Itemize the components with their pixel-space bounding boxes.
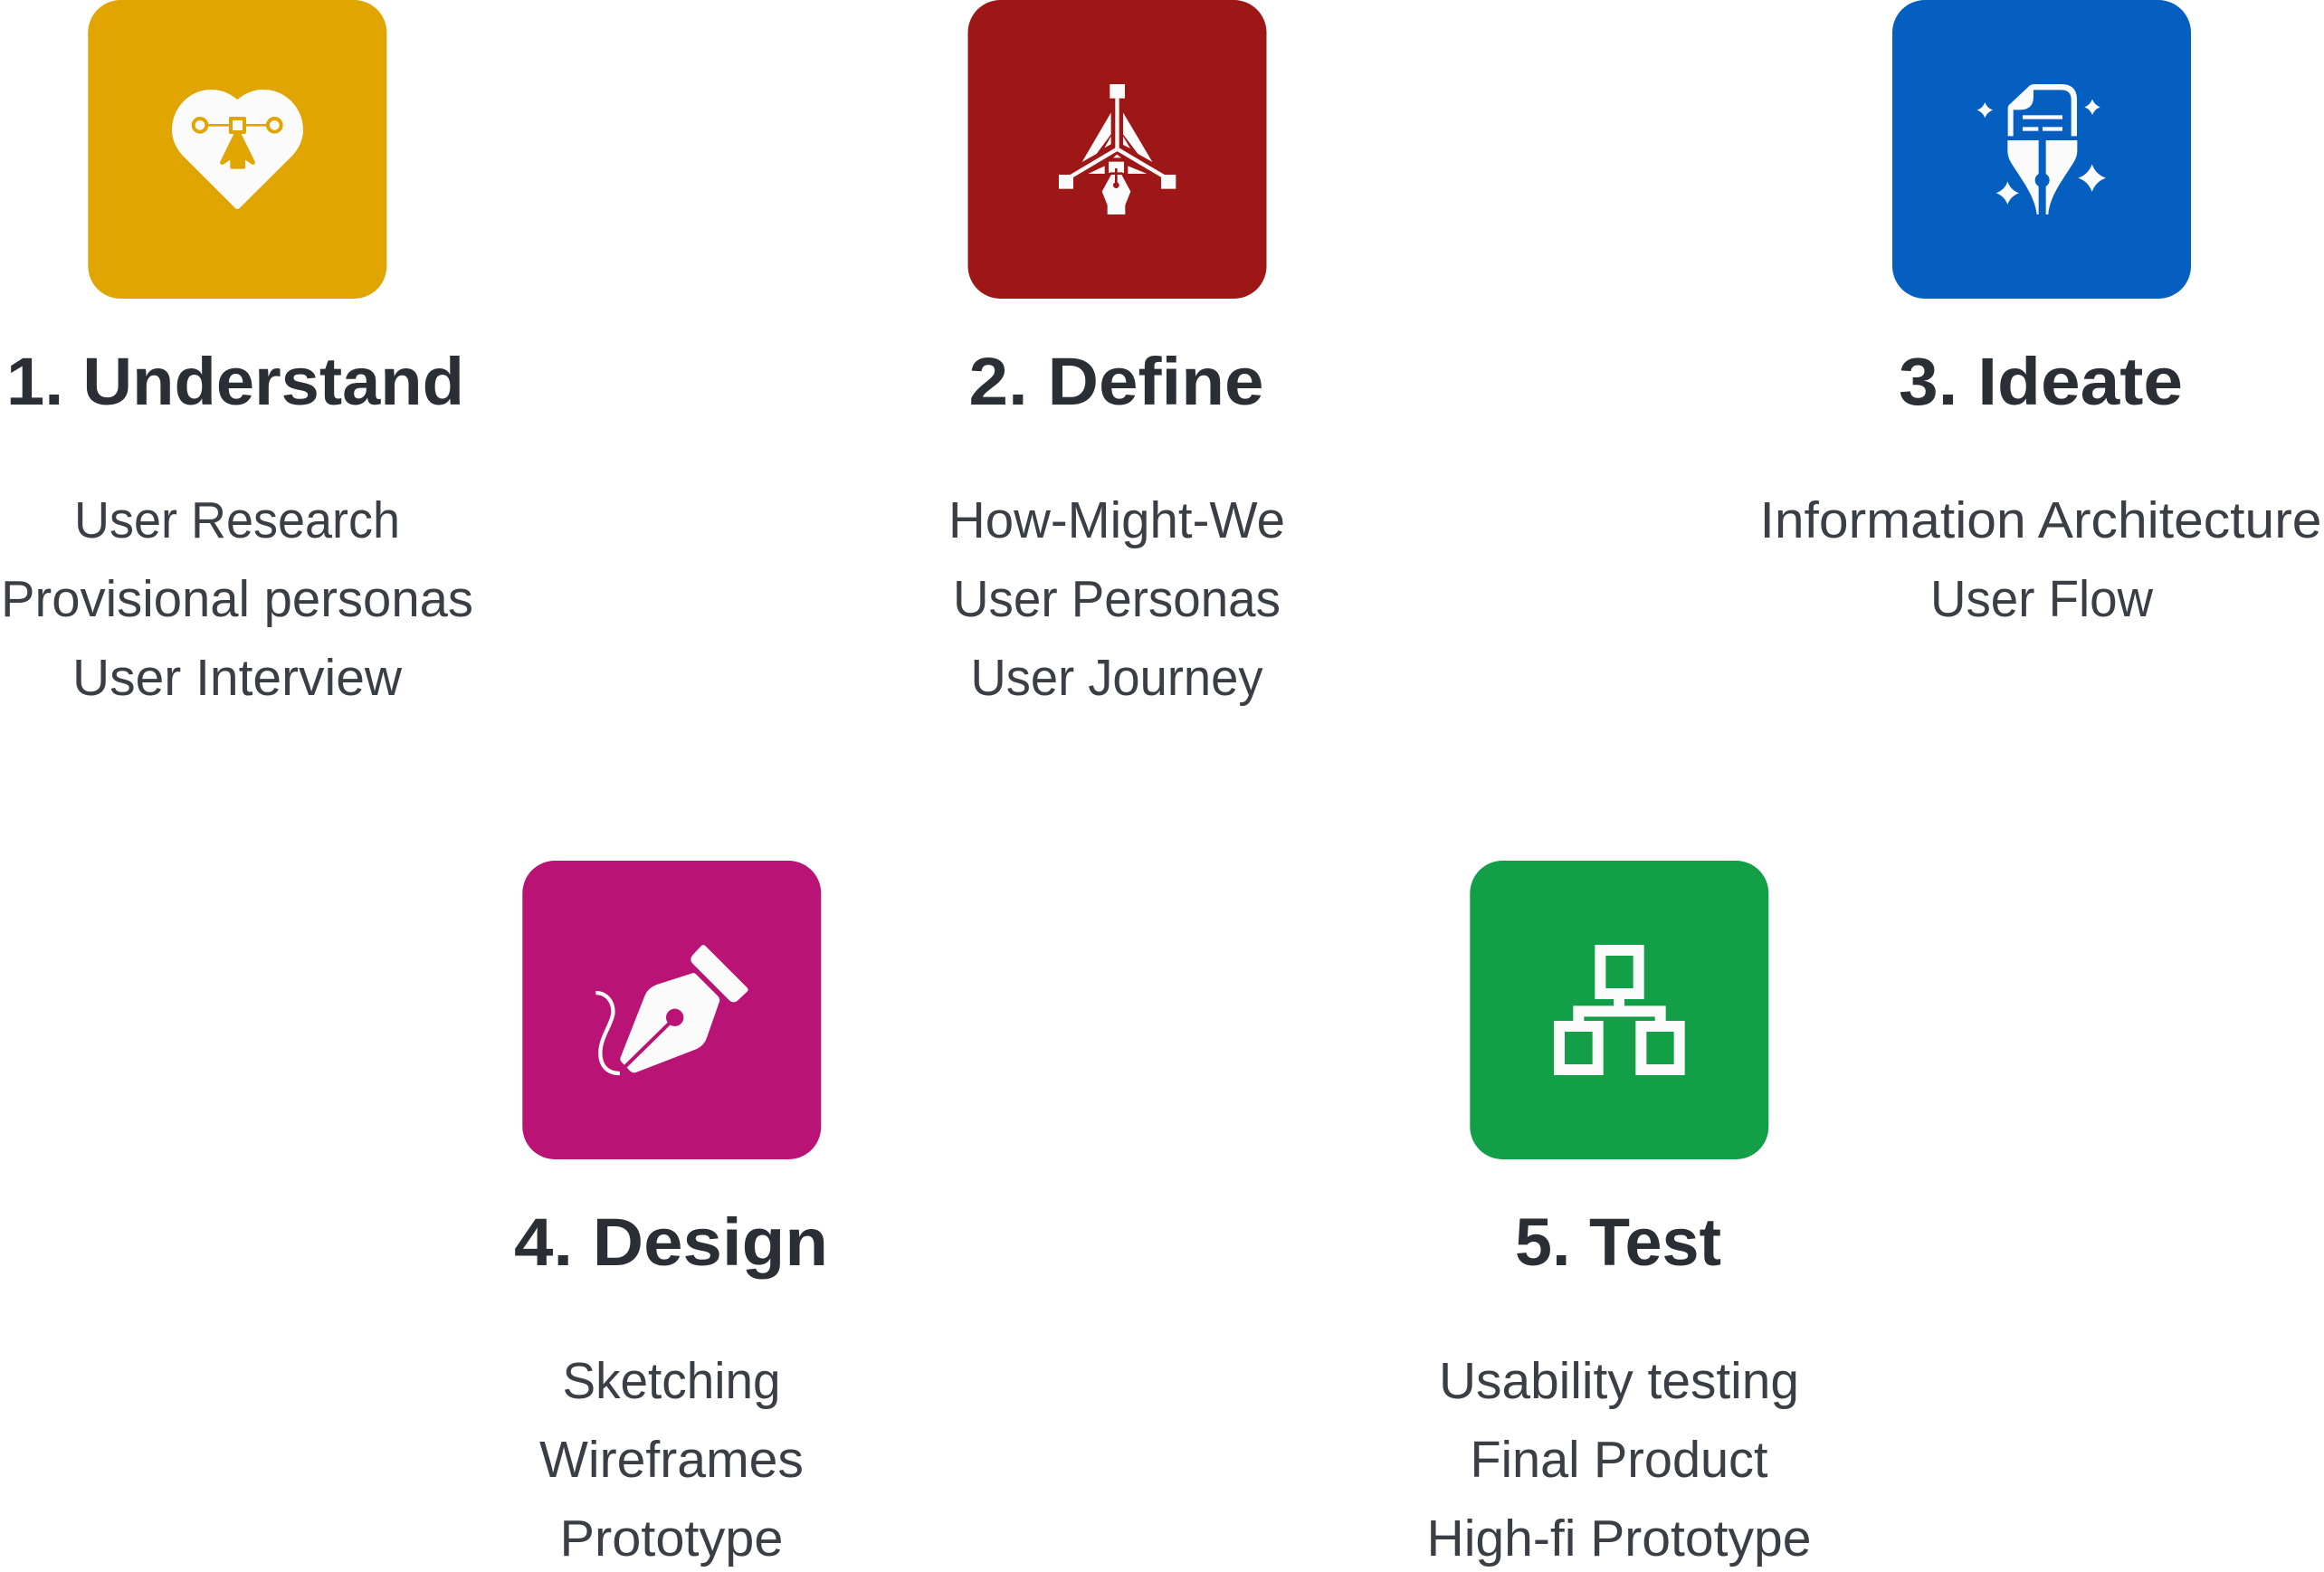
heading: 4. Design: 4. Design [514,1205,828,1280]
list: test activities [1426,1352,1812,1567]
heading: 2. Define: 2. Define [968,344,1263,419]
panel: step 4 design [514,861,828,1567]
panel: step 3 ideate [1759,0,2322,628]
list: ideate activities: Information Architecture [1759,491,2322,549]
list: define activities: User Journey [970,649,1263,707]
list: design activities: Wireframes [539,1431,804,1489]
list: define activities [948,491,1285,707]
icon card: gold heart with vector path [88,0,386,299]
panel: step 1 understand [1,0,473,707]
list: understand activities: User Research [74,491,400,549]
icon card: blue document pen with sparkles [1892,0,2191,299]
panel: step 5 test [1426,861,1812,1567]
list: ideate activities: User Flow [1930,570,2154,628]
list: ideate activities [1759,491,2322,628]
list: understand activities [1,491,473,707]
list: define activities: How-Might-We [948,491,1285,549]
heading: 3. Ideate: 3. Ideate [1899,344,2183,419]
list: design activities [539,1352,804,1567]
list: design activities: Prototype [559,1510,784,1567]
list: understand activities: User Interview [72,649,403,707]
panel: step 2 define [948,0,1285,707]
list: test activities: Usability testing [1439,1352,1799,1410]
heading: 5. Test: 5. Test [1515,1205,1721,1280]
icon card: green hierarchy diagram [1470,861,1768,1159]
list: define activities: User Personas [953,570,1281,628]
heading: 1. Understand: 1. Understand [6,344,464,419]
icon card: magenta fountain pen [522,861,821,1159]
list: understand activities: Provisional personas [1,570,473,628]
icon card: red vector pen [968,0,1267,299]
list: design activities: Sketching [563,1352,780,1410]
list: test activities: Final Product [1470,1431,1768,1489]
list: test activities: High-fi Prototype [1426,1510,1812,1567]
